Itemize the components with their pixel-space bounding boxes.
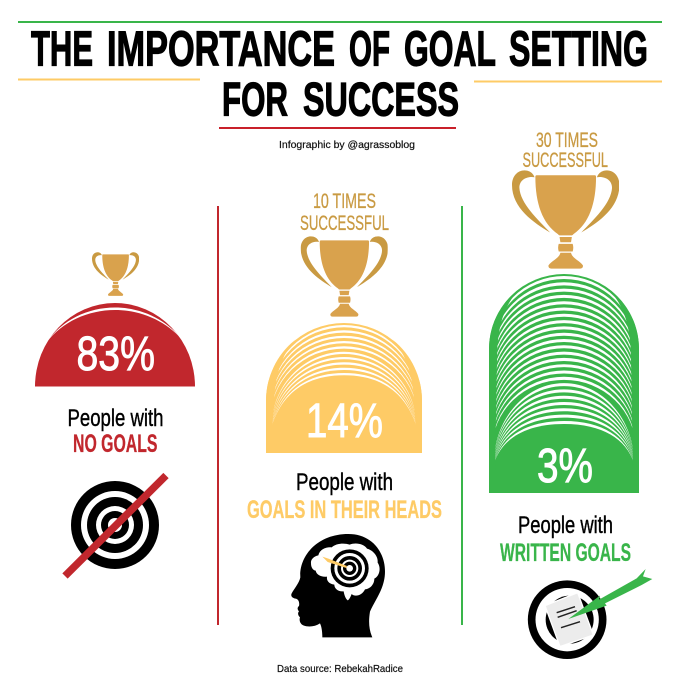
panel: no goals xyxy=(35,252,195,576)
title line 1: GOAL xyxy=(404,22,496,76)
icon: medium trophy xyxy=(301,236,388,317)
green striped dome xyxy=(489,274,639,493)
column divider red xyxy=(217,206,219,625)
panel: goals in their heads xyxy=(247,190,442,637)
byline: Infographic by @agrassoblog xyxy=(279,140,415,151)
value 14%: 14% xyxy=(306,395,383,448)
yellow striped dome xyxy=(266,323,422,453)
caption: 30 times: 30 TIMES xyxy=(536,129,598,152)
title line 1: OF xyxy=(349,22,390,76)
label: goals in their heads: GOALS IN THEIR HEADS xyxy=(247,496,442,524)
value 3%: 3% xyxy=(537,440,593,493)
label: people with: People with xyxy=(518,512,613,539)
icon: document target with arrow xyxy=(528,569,652,659)
label: people with: People with xyxy=(68,405,164,432)
caption: 10 times: 10 TIMES xyxy=(313,190,376,213)
column divider green xyxy=(461,206,463,625)
footer: data source: Data source: RebekahRadice xyxy=(277,663,403,675)
caption: successful: SUCCESSFUL xyxy=(522,149,608,172)
title line 1 xyxy=(31,22,648,76)
red rule under title xyxy=(219,127,456,129)
right yellow rule xyxy=(474,80,662,82)
title line 1: IMPORTANCE xyxy=(107,22,335,76)
value 83%: 83% xyxy=(76,328,155,381)
icon: large trophy xyxy=(512,170,619,269)
red dome 83% xyxy=(35,303,195,386)
header: title block xyxy=(18,21,662,151)
label: no goals: NO GOALS xyxy=(73,430,158,458)
left yellow rule xyxy=(18,78,200,80)
label: people with: People with xyxy=(296,469,393,496)
icon: head with target xyxy=(291,534,385,637)
caption: successful: SUCCESSFUL xyxy=(300,212,389,235)
title line 1: THE xyxy=(31,22,93,76)
panel: written goals xyxy=(489,129,652,659)
title line 2: SUCCESS xyxy=(303,72,459,126)
icon: small trophy xyxy=(92,252,139,296)
title line 2: FOR xyxy=(222,72,288,126)
icon: crossed-out target xyxy=(65,476,166,576)
title line 2 xyxy=(222,72,459,126)
top green rule xyxy=(18,21,662,23)
